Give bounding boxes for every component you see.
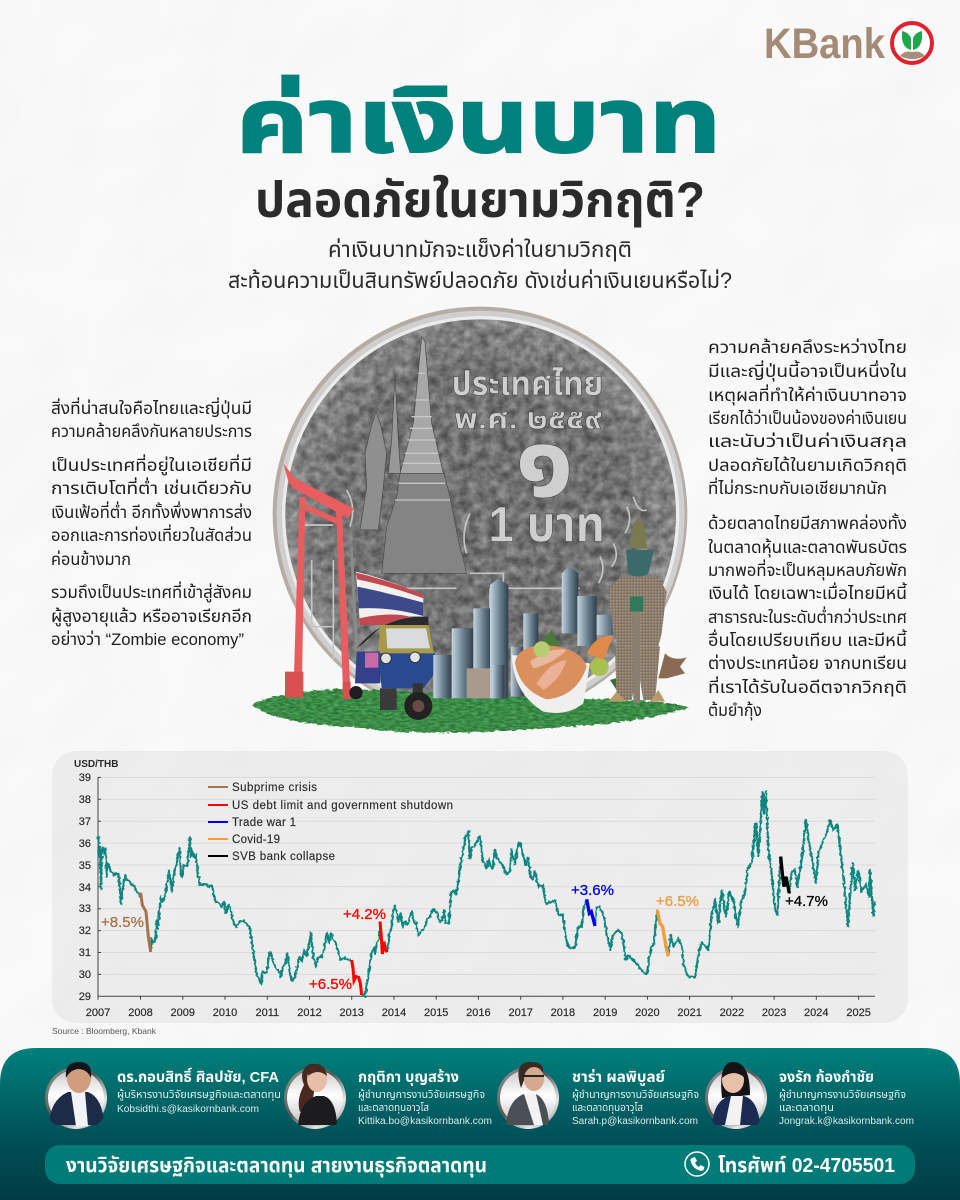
intro text: [228, 237, 732, 293]
x-axis labels: 2015: [424, 1007, 448, 1019]
x-axis labels: 2007: [86, 1007, 110, 1019]
right text block: ต้มยำกุ้ง: [708, 702, 762, 720]
panel: USD/THB line chart: [52, 751, 908, 1023]
portrait 1: [45, 1062, 107, 1129]
x-axis labels: 2008: [128, 1007, 153, 1019]
coin engraving: temple: [303, 337, 647, 660]
contact bar: [45, 1145, 915, 1184]
right text block: ที่ไม่กระทบกับเอเชียมากนัก: [708, 477, 887, 498]
title: ค่าเงินบาท: [236, 72, 721, 172]
portrait 2: [284, 1064, 346, 1129]
right text block: ต่างประเทศน้อย จากบทเรียน: [708, 655, 907, 673]
left text block: ค่อนข้างมาก: [51, 551, 131, 569]
x-axis labels: 2019: [593, 1007, 617, 1019]
x-axis labels: 2014: [382, 1007, 406, 1019]
x-axis labels: 2024: [804, 1007, 829, 1019]
annotation: +6.5% orange: +6.5%: [656, 893, 699, 910]
portrait 3: [497, 1062, 559, 1129]
person: Jongrak: จงรัก ก้องกำชัย: [779, 1068, 874, 1086]
right text block: เรียกได้ว่าเป็นน้องของค่าเงินเยน: [708, 410, 907, 428]
person: Jongrak: ผู้ชำนาญการงานวิจัยเศรษฐกิจ: [779, 1089, 906, 1101]
logo: KBank: KBank: [764, 20, 885, 68]
right text block: ปลอดภัยได้ในยามเกิดวิกฤติ: [708, 457, 907, 475]
x-axis labels: 2013: [339, 1007, 364, 1019]
y-axis labels: 32: [79, 925, 91, 937]
annotation: +3.6%: +3.6%: [571, 882, 614, 899]
right text block: [708, 339, 907, 720]
person: Sarah: และตลาดทุนอาวุโส: [572, 1102, 643, 1114]
x-axis labels: 2011: [255, 1007, 279, 1019]
coin engraving: inscriptions: 1 บาท: [488, 497, 605, 553]
person: Kobsidthi: [45, 1062, 281, 1129]
person: Kittika: กฤติกา บุญสร้าง: [358, 1068, 459, 1086]
y-axis labels: [79, 772, 91, 1003]
person: Sarah: ผู้ชำนาญการงานวิจัยเศรษฐกิจ: [572, 1089, 699, 1101]
person: Kobsidthi: ดร.กอบสิทธิ์ ศิลปชัย, CFA: [117, 1067, 279, 1086]
city skyline: [433, 566, 618, 698]
Thai flag: [350, 547, 423, 650]
coin engraving: inscriptions: พ.ศ. ๒๕๕๙: [454, 403, 602, 434]
x-axis labels: [86, 1007, 871, 1019]
right text block: อื่นโดยเปรียบเทียบ และมีหนี้: [708, 629, 907, 650]
highlight: trade war segment: [587, 899, 595, 926]
legend: Covid-19: [232, 834, 280, 846]
source note: Source : Bloomberg, Kbank: [52, 1026, 157, 1036]
panel: footer: [0, 1048, 960, 1200]
person: Jongrak: [705, 1062, 914, 1129]
left text block: การเติบโตที่ต่ำ เช่นเดียวกับ: [51, 477, 252, 498]
y-axis labels: 30: [79, 969, 91, 981]
right text block: ที่เราได้รับในอดีตจากวิกฤติ: [708, 676, 907, 697]
tuk-tuk: [349, 617, 435, 720]
legend: US debt limit and government shutdown: [232, 800, 453, 812]
legend: Subprime crisis: [232, 782, 317, 794]
giant guardian statue: [608, 517, 687, 703]
person: Sarah: [497, 1062, 699, 1129]
intro text: สะท้อนความเป็นสินทรัพย์ปลอดภัย ดังเช่นค่าเงินเยนหรือไม่?: [228, 268, 732, 293]
left text block: รวมถึงเป็นประเทศที่เข้าสู่สังคม: [51, 581, 252, 602]
y-axis labels: 38: [79, 794, 91, 806]
annotation: +6.5% red: +6.5%: [309, 976, 352, 993]
left text block: ออกและการท่องเที่ยวในสัดส่วน: [51, 524, 252, 545]
person: Jongrak: Jongrak.k@kasikornbank.com: [779, 1116, 914, 1127]
right text block: ด้วยตลาดไทยมีสภาพคล่องทั้ง: [708, 513, 907, 533]
annotation: +4.7%: +4.7%: [785, 893, 828, 910]
y-axis title: USD/THB: [74, 759, 118, 770]
x-axis labels: 2012: [297, 1007, 322, 1019]
person: Jongrak: และตลาดทุน: [779, 1102, 834, 1114]
icon: KBank seedling emblem: [892, 23, 932, 63]
right text block: เหตุผลที่ทำให้ค่าเงินบาทอาจ: [708, 384, 907, 405]
person: Kittika: [284, 1064, 492, 1129]
icon: phone: [685, 1152, 709, 1176]
left text block: ผู้สูงอายุแล้ว หรืออาจเรียกอีก: [51, 608, 252, 626]
person: Kittika: และตลาดทุนอาวุโส: [358, 1102, 429, 1114]
coin engraving: inscriptions: [452, 366, 605, 553]
y-axis labels: 31: [79, 947, 91, 959]
department name: งานวิจัยเศรษฐกิจและตลาดทุน สายงานธุรกิจตลาดทุน: [66, 1155, 487, 1177]
y-axis labels: 36: [79, 838, 91, 850]
highlight: US debt limit segments: [352, 922, 387, 995]
y-axis labels: 29: [79, 991, 91, 1003]
coin engraving: inscriptions: ประเทศไทย: [452, 366, 603, 403]
x-axis labels: 2017: [508, 1007, 533, 1019]
person: Kittika: Kittika.bo@kasikornbank.com: [358, 1116, 492, 1127]
person: Kittika: ผู้ชำนาญการงานวิจัยเศรษฐกิจ: [358, 1089, 485, 1101]
left text block: เงินเฟ้อที่ต่ำ อีกทั้งพึ่งพาการส่ง: [51, 501, 252, 522]
x-axis labels: 2009: [171, 1007, 195, 1019]
central illustration: coin and Thai landmarks: [252, 307, 688, 733]
person: Sarah: ชาร่า ผลพิบูลย์: [572, 1068, 665, 1087]
left text block: อย่างว่า “Zombie economy”: [51, 631, 244, 649]
legend: [208, 782, 453, 863]
series: USD/THB exchange rate line: [98, 792, 875, 996]
legend: Trade war 1: [232, 817, 296, 829]
x-axis labels: 2025: [846, 1007, 871, 1019]
right text block: และนับว่าเป็นค่าเงินสกุล: [708, 433, 907, 451]
y-axis labels: 37: [79, 816, 91, 828]
person: Sarah: Sarah.p@kasikornbank.com: [572, 1116, 698, 1127]
highlight: SVB segment: [781, 857, 789, 893]
left text block: [51, 397, 252, 649]
coin: [273, 307, 687, 721]
x-axis labels: 2020: [635, 1007, 660, 1019]
y-axis labels: 33: [79, 903, 91, 915]
legend: SVB bank collapse: [232, 851, 335, 863]
portrait 4: [705, 1062, 767, 1129]
subtitle heading: ปลอดภัยในยามวิกฤติ?: [255, 172, 705, 228]
annotation: +8.5%: +8.5%: [101, 914, 144, 931]
person: Kobsidthi: Kobsidthi.s@kasikornbank.com: [117, 1104, 259, 1115]
phone number: โทรศัพท์ 02-4705501: [718, 1155, 895, 1177]
right text block: สาธารณะในระดับต่ำกว่าประเทศ: [708, 606, 907, 627]
annotation: +4.2%: +4.2%: [343, 906, 386, 923]
intro text: ค่าเงินบาทมักจะแข็งค่าในยามวิกฤติ: [328, 237, 632, 262]
x-axis labels: 2016: [466, 1007, 491, 1019]
left text block: ความคล้ายคลึงกันหลายประการ: [51, 423, 252, 441]
right text block: ความคล้ายคลึงระหว่างไทย: [708, 339, 907, 357]
x-axis labels: 2022: [720, 1007, 744, 1019]
grass: [252, 688, 688, 733]
x-axis labels: 2021: [677, 1007, 702, 1019]
highlight: subprime crisis segment: [141, 893, 151, 952]
tom yum bowl: [512, 630, 638, 713]
x-axis labels: 2010: [213, 1007, 237, 1019]
y-axis labels: 34: [79, 882, 91, 894]
right text block: ในตลาดหุ้นและตลาดพันธบัตร: [708, 539, 907, 557]
right text block: มีและญี่ปุ่นนี้อาจเป็นหนึ่งใน: [708, 360, 907, 381]
highlight: covid-19 segment: [657, 910, 668, 956]
person: Kobsidthi: ผู้บริหารงานวิจัยเศรษฐกิจและตลาดทุน: [117, 1089, 281, 1101]
coin engraving: inscriptions: ๑: [515, 395, 574, 522]
x-axis labels: 2018: [551, 1007, 575, 1019]
x-axis labels: 2023: [762, 1007, 786, 1019]
right text block: มากพอที่จะเป็นหลุมหลบภัยพัก: [708, 559, 907, 580]
left text block: สิ่งที่น่าสนใจคือไทยและญี่ปุ่นมี: [51, 397, 252, 418]
right text block: เงินได้ โดยเฉพาะเมื่อไทยมีหนี้: [708, 582, 907, 603]
y-axis labels: 39: [79, 772, 91, 784]
left text block: เป็นประเทศที่อยู่ในเอเชียที่มี: [51, 454, 252, 475]
y-axis labels: 35: [79, 860, 91, 872]
giant swing: [283, 463, 353, 699]
